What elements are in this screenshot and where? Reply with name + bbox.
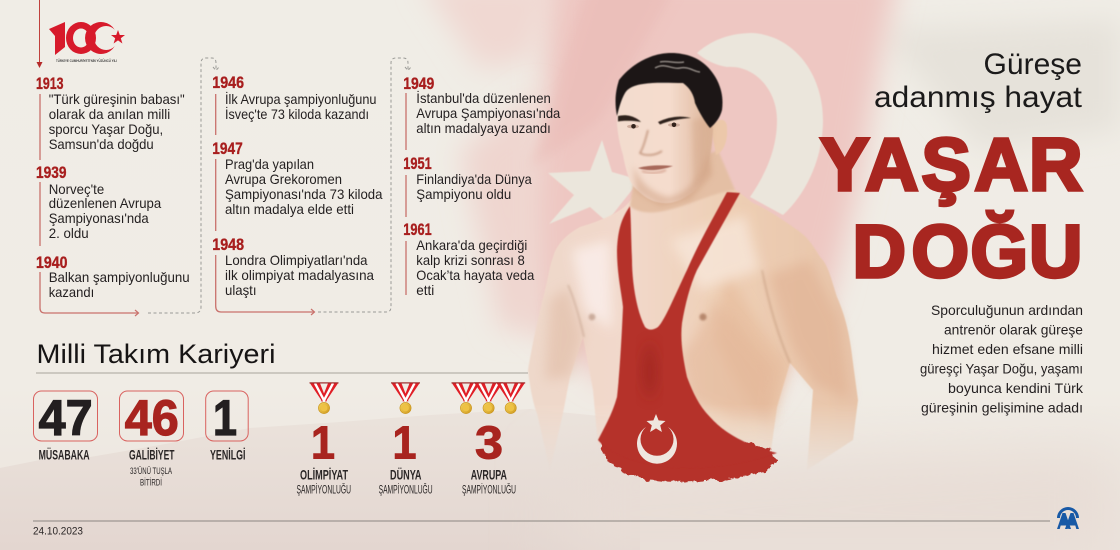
background: Turkish flag bbox=[420, 0, 900, 400]
text 1939 bbox=[49, 182, 162, 241]
timeline column 3 bbox=[403, 74, 561, 298]
stat: 1 loss: YENİLGİ bbox=[210, 446, 246, 462]
portrait neck bbox=[630, 150, 735, 213]
portrait brows and eyes bbox=[618, 115, 691, 129]
flag star bbox=[548, 140, 640, 224]
description paragraph: hizmet eden efsane milli bbox=[932, 342, 1083, 357]
year 1961: 1961 bbox=[403, 220, 432, 239]
text 1961: Ankara'da geçirdiği bbox=[416, 238, 527, 253]
text 1949: Avrupa Şampiyonası'nda bbox=[416, 106, 561, 121]
dashed connector 1 to 2 bbox=[148, 58, 219, 313]
subtitle bbox=[874, 48, 1082, 114]
title: name bbox=[820, 123, 1082, 293]
portrait body bbox=[528, 178, 858, 470]
text 1961: kalp krizi sonrası 8 bbox=[416, 253, 525, 268]
text 1946: İsveç'te 73 kiloda kazandı bbox=[225, 107, 369, 122]
text 1939: Norveç'te bbox=[49, 182, 104, 197]
text 1948 bbox=[225, 253, 374, 298]
logo: AA bbox=[1057, 507, 1079, 529]
stat: 46 wins: BİTİRDİ bbox=[140, 478, 162, 488]
description paragraph: boyunca kendini Türk bbox=[948, 381, 1083, 396]
text 1940: Balkan şampiyonluğunu bbox=[49, 270, 190, 285]
icon: three medals bbox=[452, 382, 525, 414]
year 1949: 1949 bbox=[403, 74, 434, 93]
text 1947: altın madalya elde etti bbox=[225, 202, 354, 217]
text 1961 bbox=[416, 238, 535, 298]
heading: national team career: Milli Takım Kariyeri bbox=[36, 339, 276, 369]
text 1948: ulaştı bbox=[225, 283, 256, 298]
portrait: Yaşar Doğu bbox=[528, 53, 858, 482]
year 1939: 1939 bbox=[36, 163, 66, 182]
stat: european championship: AVRUPA bbox=[471, 466, 507, 482]
timeline column 2 bbox=[212, 73, 383, 315]
text 1951: Şampiyonu oldu bbox=[416, 187, 511, 202]
text 1951: Finlandiya'da Dünya bbox=[416, 172, 532, 187]
description paragraph: güreşinin gelişimine adadı bbox=[921, 400, 1083, 416]
portrait face bbox=[617, 75, 713, 203]
stat: olympic championship bbox=[296, 382, 351, 496]
text 1946 bbox=[225, 92, 376, 122]
text 1947: Şampiyonası'nda 73 kiloda bbox=[225, 187, 383, 202]
year 1948: 1948 bbox=[212, 235, 244, 254]
text 1947 bbox=[225, 157, 383, 217]
singlet star and crescent bbox=[637, 414, 677, 464]
text 1946: İlk Avrupa şampiyonluğunu bbox=[225, 92, 376, 107]
text 1913: Samsun'da doğdu bbox=[49, 137, 154, 152]
description paragraph: antrenör olarak güreşe bbox=[944, 322, 1083, 338]
subtitle: adanmış hayat bbox=[874, 81, 1082, 114]
subtitle: Güreşe bbox=[984, 48, 1082, 81]
stat: world championship: ŞAMPİYONLUĞU bbox=[379, 482, 433, 496]
stat: 46 wins bbox=[120, 390, 184, 488]
stat: 46 wins: 33'ÜNÜ TUŞLA bbox=[130, 466, 172, 477]
timeline column 1 bbox=[36, 74, 190, 316]
stat: olympic championship: OLİMPİYAT bbox=[300, 466, 348, 482]
stat: 46 wins: 46 bbox=[125, 390, 179, 446]
timeline connector arrow from logo bbox=[36, 0, 42, 68]
stat: world championship bbox=[379, 382, 433, 496]
logo: 100th anniversary bbox=[49, 22, 125, 63]
stat: 47 matches bbox=[34, 390, 98, 462]
year 1913: 1913 bbox=[36, 74, 64, 93]
text 1949: İstanbul'da düzenlenen bbox=[416, 91, 551, 106]
chest shadows bbox=[720, 284, 794, 424]
text 1939: düzenlenen Avrupa bbox=[49, 196, 162, 211]
stat: european championship: ŞAMPİYONLUĞU bbox=[462, 482, 516, 496]
stat: olympic championship: ŞAMPİYONLUĞU bbox=[296, 482, 351, 496]
stat: world championship: 1 bbox=[392, 416, 416, 468]
icon: medal bbox=[391, 382, 420, 414]
description paragraph: Sporculuğunun ardından bbox=[931, 303, 1083, 318]
text 1940: kazandı bbox=[49, 285, 94, 300]
text 1961: Ocak’ta hayata veda bbox=[416, 268, 535, 283]
year 1947: 1947 bbox=[212, 139, 243, 158]
description paragraph: güreşçi Yaşar Doğu, yaşamı bbox=[920, 362, 1083, 376]
dashed connector 2 to 3 bbox=[318, 58, 411, 312]
text 1913: sporcu Yaşar Doğu, bbox=[49, 122, 163, 137]
text 1948: ilk olimpiyat madalyasına bbox=[225, 268, 374, 283]
description paragraph bbox=[920, 303, 1083, 416]
text 1939: 2. oldu bbox=[49, 226, 89, 241]
flag crescent bbox=[697, 33, 823, 215]
icon: medal bbox=[310, 382, 338, 414]
logo: 100th anniversary: TÜRKİYE CUMHURİYETİ'NİN YÜZÜNCÜ YILI bbox=[56, 58, 117, 63]
stat: 1 loss bbox=[206, 390, 248, 462]
stat: olympic championship: 1 bbox=[311, 416, 335, 468]
title: name: YAŞAR bbox=[820, 123, 1082, 206]
date: 24.10.2023 bbox=[33, 526, 83, 538]
text 1949 bbox=[416, 91, 561, 136]
text 1913: olarak da anılan milli bbox=[49, 107, 170, 122]
year 1940: 1940 bbox=[36, 253, 68, 272]
portrait singlet bbox=[598, 192, 777, 468]
stat: 47 matches: 47 bbox=[39, 390, 93, 446]
text 1951 bbox=[416, 172, 532, 202]
portrait nose and mouth bbox=[638, 130, 673, 173]
text 1940 bbox=[49, 270, 190, 300]
text 1913 bbox=[49, 92, 185, 152]
stat: 46 wins: GALİBİYET bbox=[129, 446, 175, 462]
stat: 1 loss: 1 bbox=[213, 390, 237, 446]
text 1961: etti bbox=[416, 283, 434, 298]
portrait hair bbox=[616, 53, 722, 128]
title: name: DOĞU bbox=[852, 210, 1082, 293]
portrait ear bbox=[711, 120, 727, 155]
stat: 47 matches: MÜSABAKA bbox=[39, 446, 90, 462]
text 1939: Şampiyonası'nda bbox=[49, 211, 149, 226]
stat: european championship bbox=[452, 382, 525, 496]
text 1949: altın madalyaya uzandı bbox=[416, 121, 551, 136]
stat: european championship: 3 bbox=[475, 416, 503, 468]
year 1946: 1946 bbox=[212, 73, 244, 92]
text 1913: "Türk güreşinin babası" bbox=[49, 92, 185, 107]
singlet lower rough edge bbox=[600, 410, 775, 482]
stat: world championship: DÜNYA bbox=[390, 466, 422, 482]
text 1947: Avrupa Grekoromen bbox=[225, 172, 342, 187]
text 1948: Londra Olimpiyatları'nda bbox=[225, 253, 368, 268]
year 1951: 1951 bbox=[403, 154, 432, 173]
text 1947: Prag'da yapılan bbox=[225, 157, 314, 172]
